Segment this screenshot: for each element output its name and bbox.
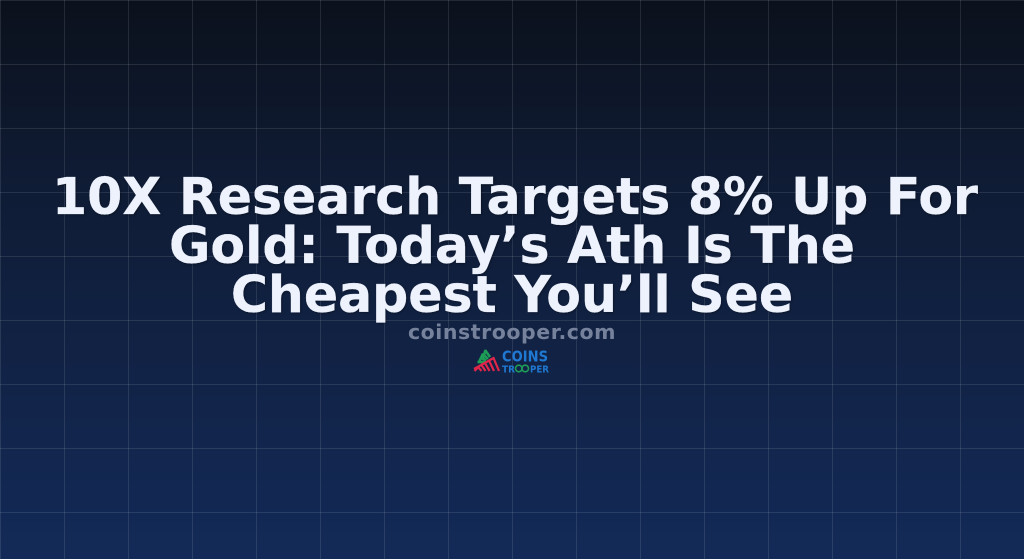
icon: green and red mountain chart [474,350,499,371]
title: Cheapest You’ll See [231,265,793,324]
icon: coinstrooper logo [474,348,549,375]
logo wordmark [502,348,549,376]
title: Gold: Today’s Ath Is The [169,216,855,275]
title: 10X Research Targets 8% Up For [52,167,978,226]
title [52,167,980,324]
source website: coinstrooper.com [408,320,616,344]
